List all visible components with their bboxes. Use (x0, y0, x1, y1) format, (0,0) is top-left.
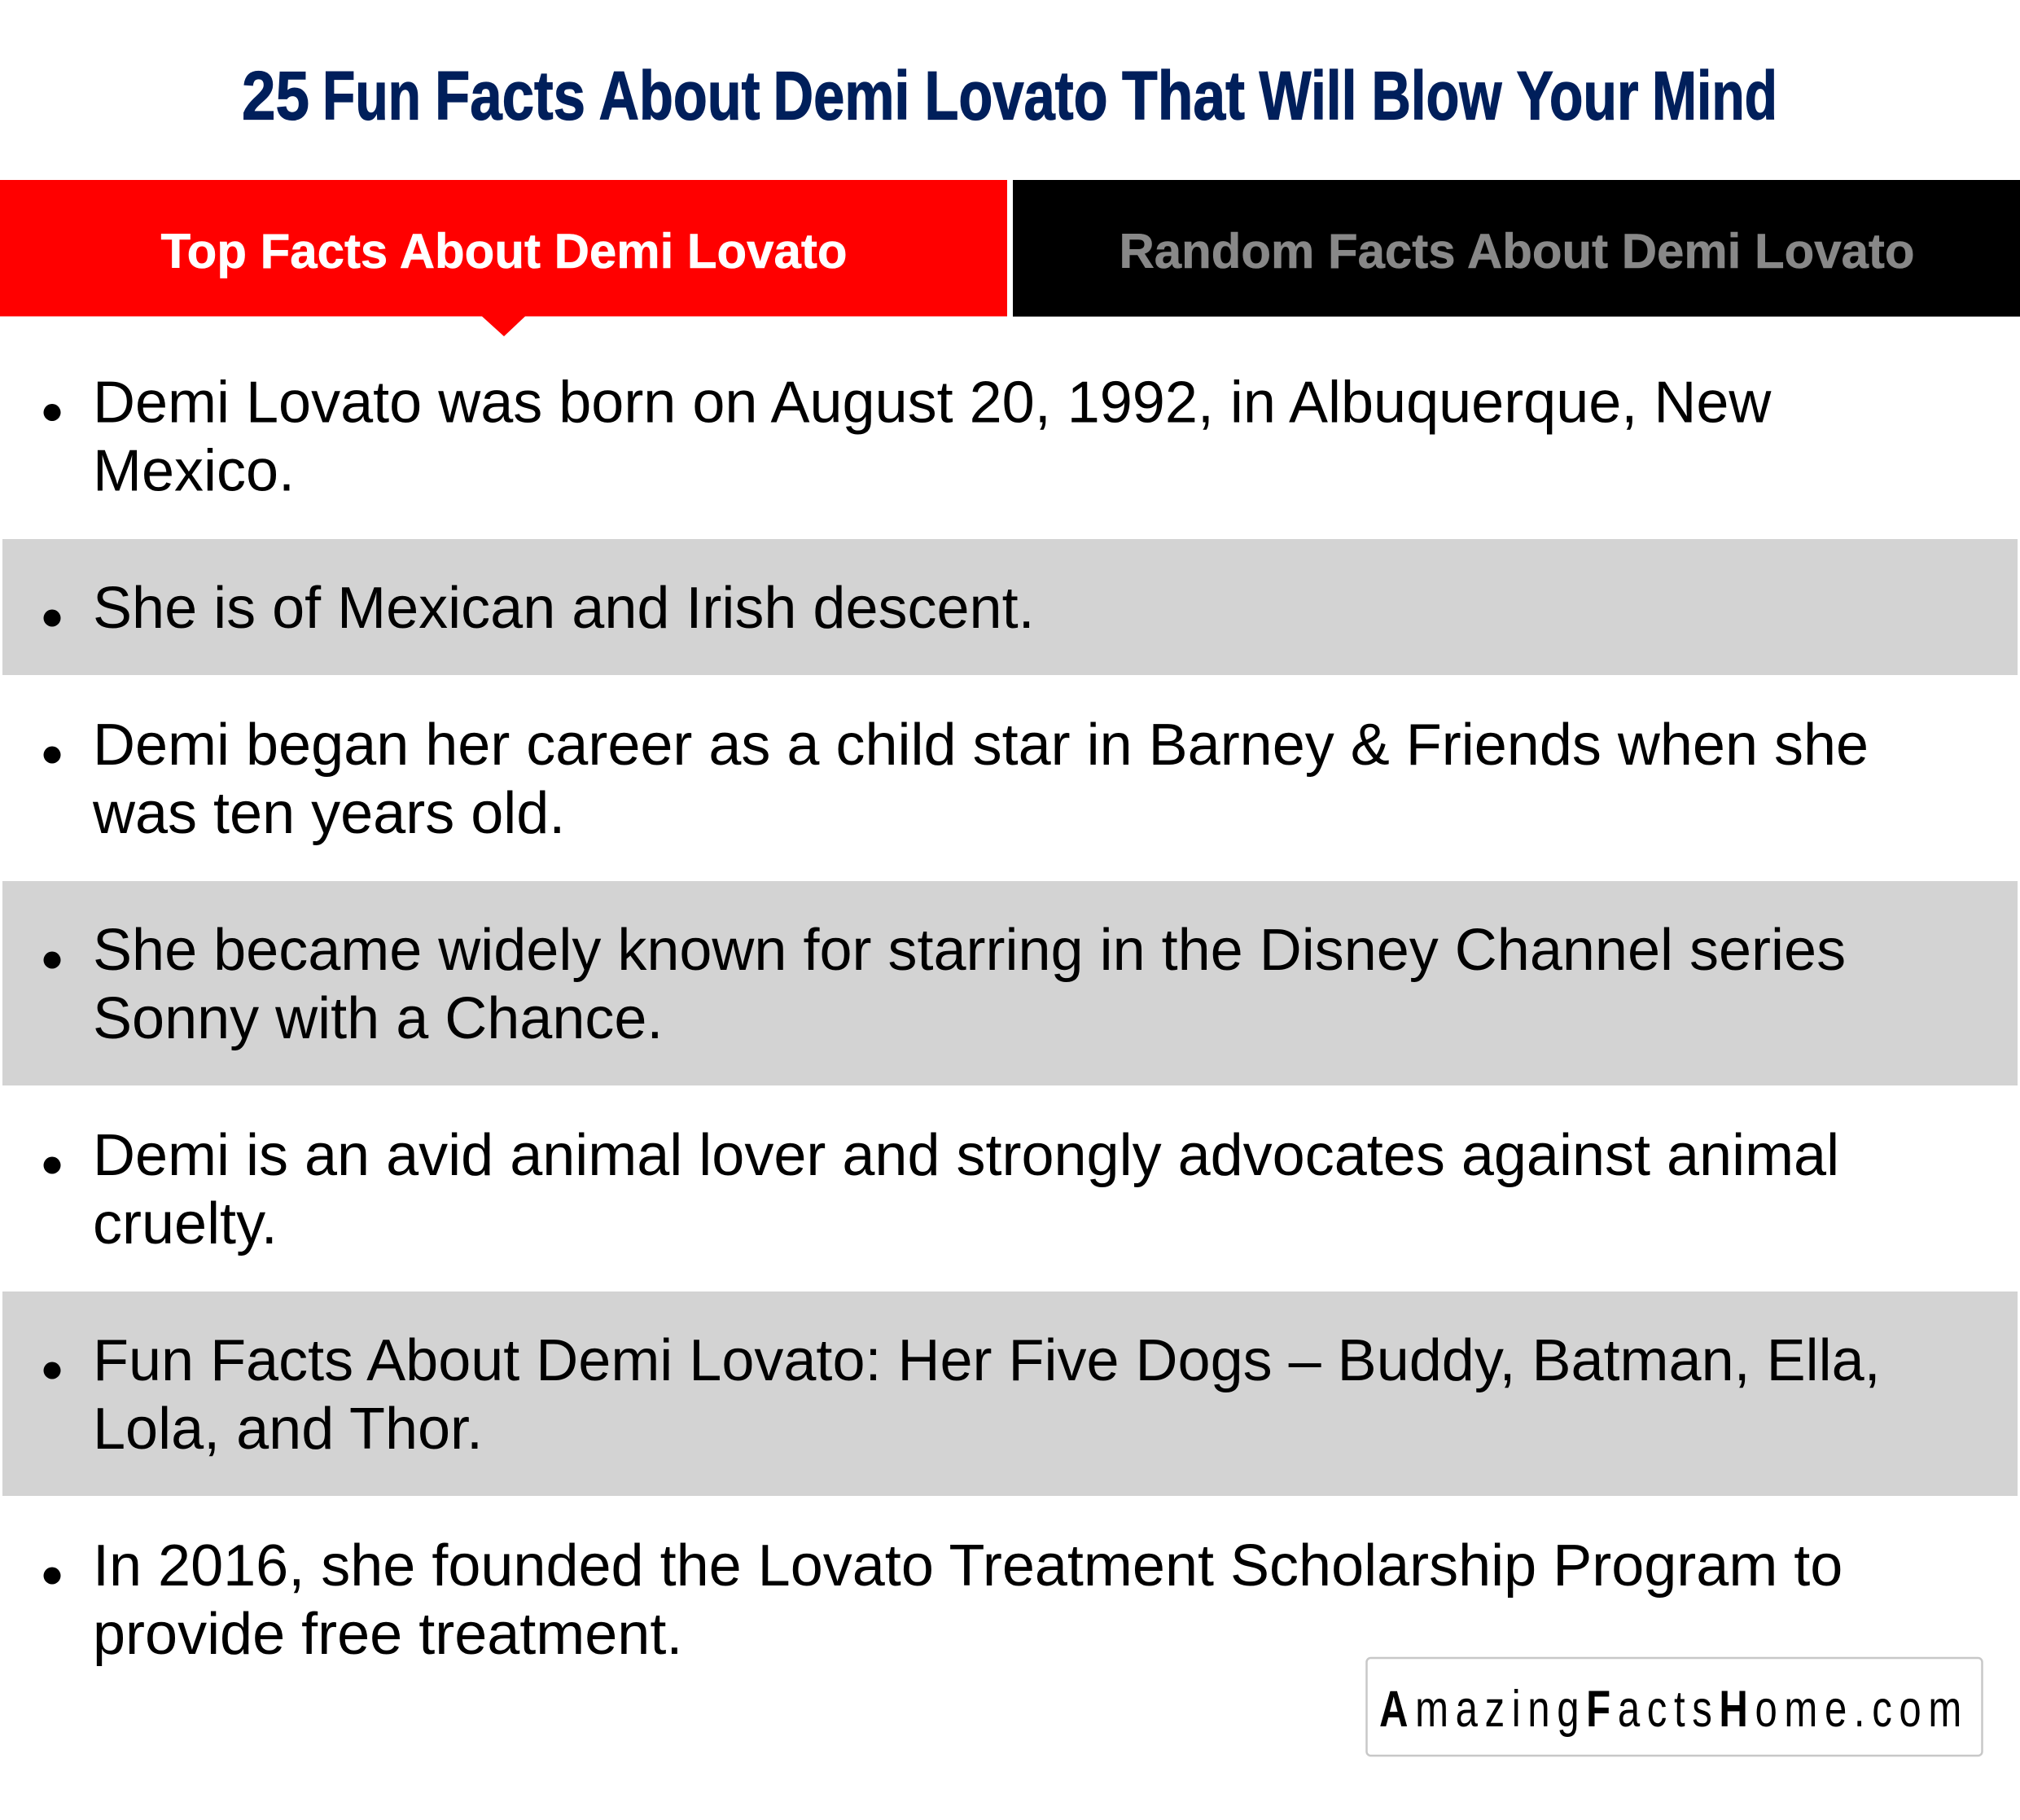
fact 1 (44, 370, 1772, 503)
title: Fun (322, 58, 421, 134)
title: About (599, 58, 760, 134)
title: Will (1259, 58, 1356, 134)
watermark text: AmazingFactsHome.com (1379, 1680, 1961, 1737)
fact 1: Mexico. (93, 438, 295, 503)
fact 6 row (2, 1292, 2018, 1496)
fact 3 (44, 713, 1869, 846)
fact 4 row (2, 881, 2018, 1085)
title: Mind (1652, 58, 1777, 134)
inactive tab: random facts (1013, 180, 2020, 317)
active tab: top facts (0, 180, 1007, 336)
tab label: random facts: Random Facts About Demi Lovato (1119, 224, 1915, 278)
title: Blow (1371, 58, 1502, 134)
fact 6 row: Fun Facts About Demi Lovato: Her Five Dogs – Buddy, Batman, Ella, (93, 1328, 1881, 1393)
fact 3: Demi began her career as a child star in Barney & Friends when she (93, 713, 1869, 778)
fact 2 row (2, 539, 2018, 675)
fact 7: In 2016, she founded the Lovato Treatment Scholarship Program to (93, 1533, 1843, 1599)
fact 5: cruelty. (93, 1191, 278, 1256)
fact 5: Demi is an avid animal lover and strongly advocates against animal (93, 1123, 1839, 1188)
title: 25 (242, 58, 309, 134)
fact 1: Demi Lovato was born on August 20, 1992, in Albuquerque, New (93, 370, 1772, 435)
fact 4 row: Sonny with a Chance. (93, 986, 663, 1051)
fact 6 row: Lola, and Thor. (93, 1397, 483, 1462)
title: Lovato (925, 58, 1107, 134)
title: Demi (773, 58, 910, 134)
fact 5 (44, 1123, 1839, 1256)
fact 3: was ten years old. (92, 781, 565, 846)
fact 4 row: She became widely known for starring in the Disney Channel series (93, 918, 1846, 983)
tab label: top facts: Top Facts About Demi Lovato (161, 224, 847, 278)
fact 7: provide free treatment. (93, 1602, 682, 1667)
fact 2 row: She is of Mexican and Irish descent. (93, 576, 1035, 641)
fact 7 (44, 1533, 1843, 1667)
title: That (1122, 58, 1245, 134)
title: Facts (435, 58, 585, 134)
title: Your (1516, 58, 1638, 134)
title (242, 58, 1777, 134)
watermark badge (1366, 1658, 1982, 1756)
